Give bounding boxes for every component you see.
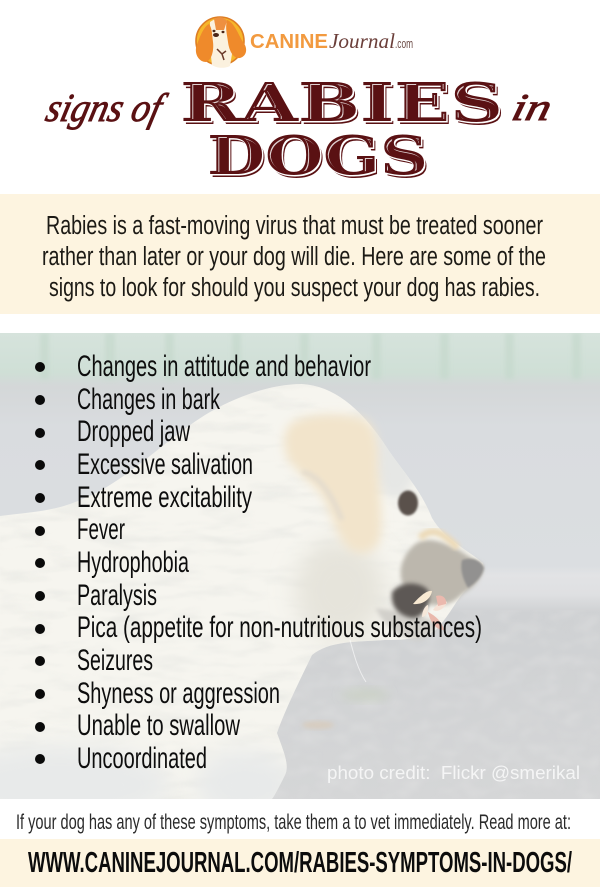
panel: website link [0,839,600,887]
title main: RABIES: RABIES [180,72,503,134]
panel: photo of snarling dog with symptoms list [0,333,600,825]
list items: Changes in attitude and behavior [77,350,371,383]
dog teeth [413,591,447,630]
icon: basset hound in circle [196,17,246,68]
list items: Seizures [77,644,153,677]
panel: introduction [0,194,600,314]
dog mouth [392,584,429,618]
dog eye [398,490,418,516]
logo wordmark: Journal [329,29,395,53]
photo credit: photo credit: Flickr @smerikal [327,763,580,783]
dog ear [284,414,381,553]
list items: Uncoordinated [77,742,207,775]
logo wordmark [250,29,413,53]
title [42,72,556,187]
title main: DOGS: DOGS [207,125,428,187]
ground texture [270,610,600,799]
title script: signs of: signs of [42,86,171,130]
list items: Excessive salivation [77,448,253,481]
list items: Paralysis [77,579,157,612]
dog body [0,380,490,825]
symptoms list [35,350,482,775]
list items: Shyness or aggression [77,677,280,710]
list items: Extreme excitability [77,481,252,514]
list items: Unable to swallow [77,709,240,742]
list items: Dropped jaw [77,415,190,448]
list items: Changes in bark [77,383,220,416]
list items [77,350,482,775]
list items: Fever [77,513,125,546]
title script: in: in [508,88,556,129]
list items: Hydrophobia [77,546,189,579]
logo: Canine Journal [196,17,413,68]
logo wordmark: .com [395,36,413,51]
logo wordmark: CANINE [250,31,328,53]
photo: snarling dog [0,333,600,825]
intro text [42,212,546,302]
list bullets [35,362,45,764]
dog muzzle [401,540,483,605]
